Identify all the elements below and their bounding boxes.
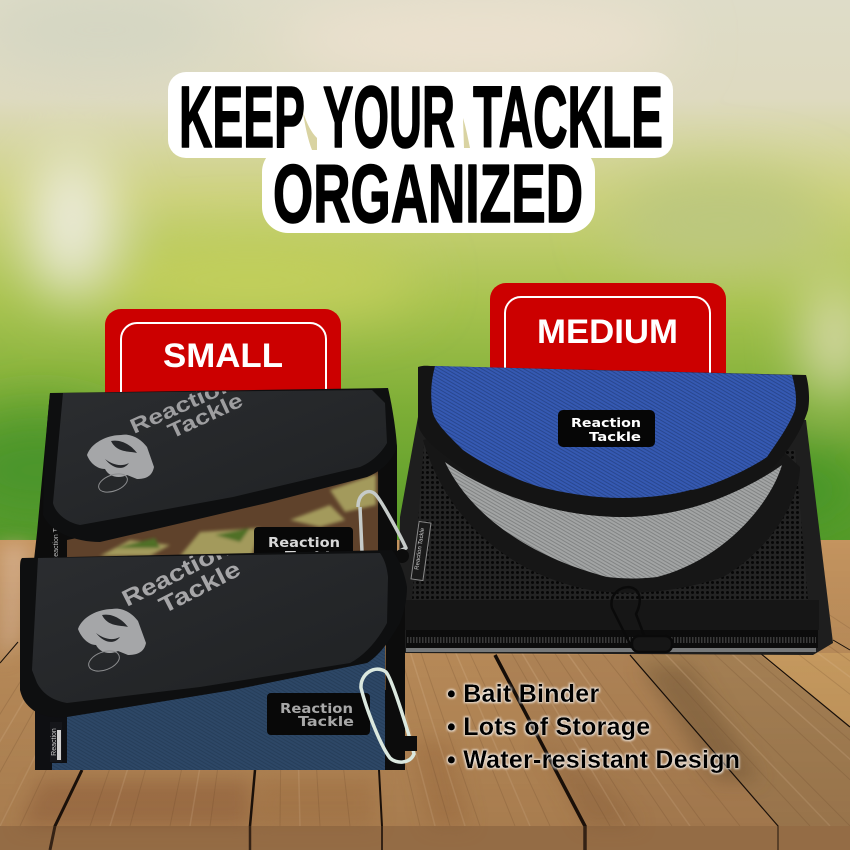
patch: camo binder: Tackle bbox=[285, 550, 341, 565]
zipper pull bbox=[611, 587, 672, 652]
bullet: water-resistant design: • Water-resistant Design bbox=[447, 746, 740, 774]
product badge: Reaction bbox=[571, 416, 641, 430]
patch: camo binder bbox=[254, 527, 353, 567]
side tag: Reaction T bbox=[53, 527, 60, 562]
wood grain bbox=[0, 614, 850, 826]
logo text: navy binder: Reaction bbox=[117, 535, 234, 611]
side tag bbox=[411, 521, 431, 581]
feature list bbox=[447, 680, 740, 774]
logo text: camo binder: Reaction bbox=[127, 372, 238, 439]
logo text: navy binder bbox=[122, 555, 240, 611]
carabiner: navy binder bbox=[361, 669, 414, 762]
title: keep your tackle organized bbox=[168, 69, 673, 240]
wood shading bbox=[0, 545, 760, 826]
title: keep your tackle organized: KEEP bbox=[179, 69, 305, 166]
logo text: camo binder bbox=[130, 391, 242, 436]
product badge: Tackle bbox=[589, 430, 641, 444]
product: small navy binder bbox=[20, 535, 417, 770]
fish emblem: camo binder bbox=[87, 435, 154, 496]
side tag: Reaction bbox=[51, 728, 58, 756]
logo text: camo binder: Tackle bbox=[164, 389, 247, 444]
product: medium blue mesh binder bbox=[398, 366, 833, 655]
logo text: navy binder: Tackle bbox=[154, 555, 245, 618]
title: keep your tackle organized: TACKLE bbox=[473, 69, 663, 166]
wooden table bbox=[0, 257, 850, 850]
title: keep your tackle organized: YOUR bbox=[323, 69, 455, 166]
fish emblem: navy binder bbox=[78, 609, 146, 675]
wood seams bbox=[0, 640, 850, 850]
product: small camo binder bbox=[34, 388, 409, 563]
patch: navy binder: Tackle bbox=[298, 714, 354, 730]
bullet: bait binder: • Bait Binder bbox=[447, 680, 599, 708]
side tag: Reaction Tackle bbox=[414, 527, 426, 570]
title sticker backing bbox=[168, 72, 673, 233]
label: small: SMALL bbox=[163, 337, 283, 375]
patch: navy binder: Reaction bbox=[280, 701, 353, 717]
patch: navy binder bbox=[267, 693, 370, 735]
label: small bbox=[105, 309, 341, 395]
product badge bbox=[558, 410, 655, 447]
label: medium: MEDIUM bbox=[537, 313, 678, 351]
label: medium bbox=[490, 283, 726, 375]
patch: camo binder: Reaction bbox=[268, 536, 340, 551]
title: keep your tackle organized: ORGANIZED bbox=[273, 147, 583, 240]
bullet: lots of storage: • Lots of Storage bbox=[447, 713, 650, 741]
table front edge bbox=[0, 540, 850, 826]
sticker notches bbox=[303, 112, 470, 150]
side tag bbox=[50, 722, 62, 762]
blurred green background bbox=[0, 0, 850, 545]
carabiner: camo binder bbox=[358, 492, 406, 552]
